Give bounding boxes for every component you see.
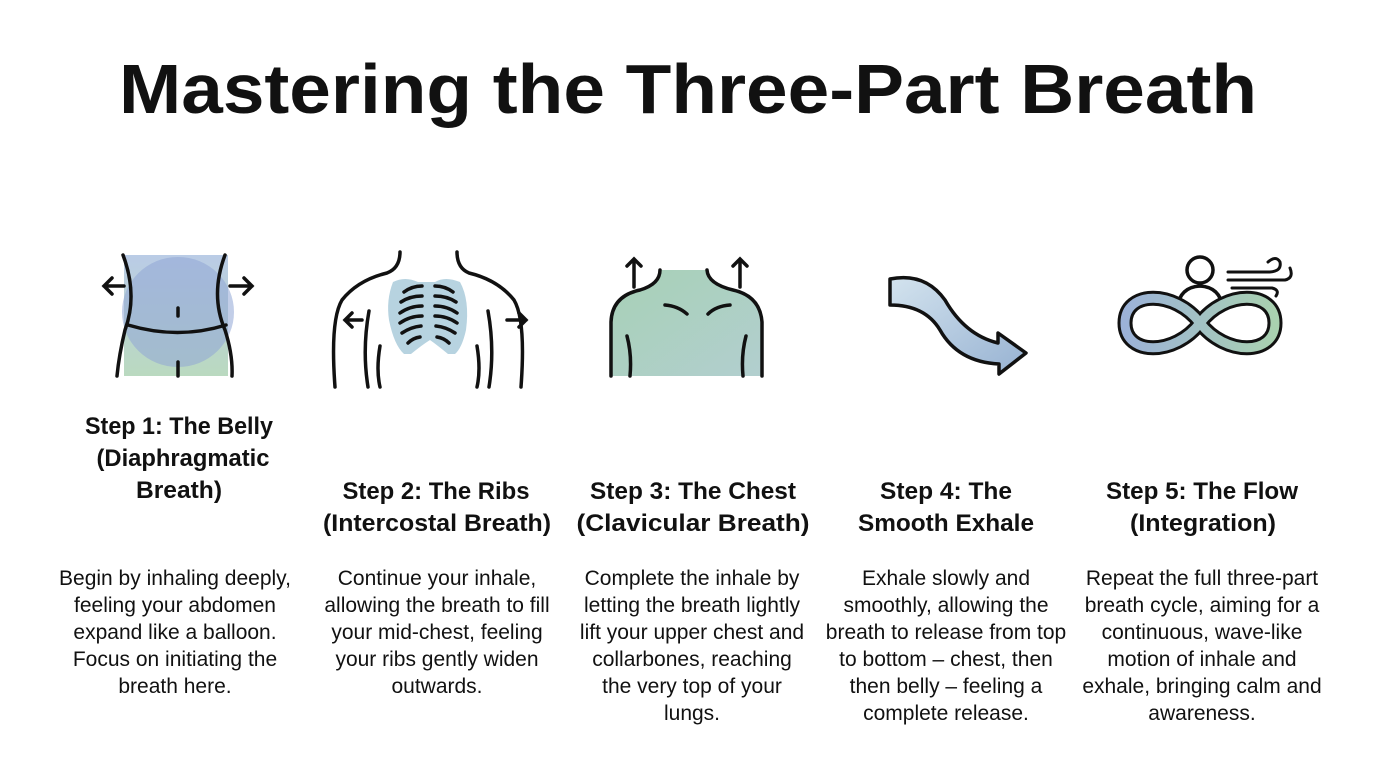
title: Mastering the Three-Part Breath <box>119 50 1257 128</box>
heading: step 2 <box>323 478 551 537</box>
text: step 1: Focus on initiating the <box>73 648 277 671</box>
heading: step 5 <box>1106 478 1298 537</box>
text: step 3: lift your upper chest and <box>580 621 804 644</box>
text: step 3: collarbones, reaching <box>592 648 792 671</box>
heading: step 5: (Integration) <box>1130 510 1276 537</box>
text: step 5: breath cycle, aiming for a <box>1085 594 1320 617</box>
text: step 5: motion of inhale and <box>1107 648 1297 671</box>
text: step 5 <box>1082 567 1322 725</box>
text: step 5: continuous, wave-like <box>1102 621 1302 644</box>
heading: step 3: (Clavicular Breath) <box>576 510 810 537</box>
icon: chest <box>611 259 762 376</box>
text: step 2: Continue your inhale, <box>338 567 536 590</box>
text: step 2: outwards. <box>391 675 483 698</box>
text: step 4: complete release. <box>863 702 1029 725</box>
text: step 2 <box>324 567 550 698</box>
text: step 3: letting the breath lightly <box>584 594 800 617</box>
text: step 3: the very top of your <box>602 675 782 698</box>
text: step 1: expand like a balloon. <box>73 621 277 644</box>
icon: ribs <box>334 252 526 387</box>
heading: step 3: Step 3: The Chest <box>590 478 796 505</box>
text: step 1: feeling your abdomen <box>74 594 276 617</box>
text: step 3 <box>580 567 804 725</box>
icon: infinity flow <box>1125 257 1291 348</box>
heading: step 3 <box>576 478 810 537</box>
heading: step 1 <box>85 413 274 504</box>
heading: step 2: (Intercostal Breath) <box>323 510 551 537</box>
text: step 5: exhale, bringing calm and <box>1082 675 1322 698</box>
text: step 1: Begin by inhaling deeply, <box>59 567 291 590</box>
text: step 2: allowing the breath to fill <box>324 594 550 617</box>
text: step 1 <box>59 567 291 698</box>
text: step 4 <box>826 567 1066 725</box>
heading: step 4: Step 4: The <box>880 478 1012 505</box>
heading: step 1: (Diaphragmatic <box>96 445 270 472</box>
heading: step 1: Breath) <box>136 477 222 504</box>
text: step 4: Exhale slowly and <box>862 567 1030 590</box>
text: step 5: awareness. <box>1148 702 1256 725</box>
text: step 4: breath to release from top <box>826 621 1066 644</box>
text: step 4: to bottom – chest, then <box>839 648 1053 671</box>
text: step 3: Complete the inhale by <box>585 567 800 590</box>
text: step 2: your mid-chest, feeling <box>331 621 543 644</box>
heading: step 4: Smooth Exhale <box>858 510 1034 537</box>
text: step 4: then belly – feeling a <box>850 675 1043 698</box>
text: step 5: Repeat the full three-part <box>1086 567 1318 590</box>
heading: step 4 <box>858 478 1034 537</box>
text: step 1: breath here. <box>118 675 232 698</box>
text: step 3: lungs. <box>664 702 720 725</box>
icon: wave arrow <box>890 278 1026 374</box>
text: step 4: smoothly, allowing the <box>843 594 1049 617</box>
icon: belly <box>104 255 252 376</box>
heading: step 2: Step 2: The Ribs <box>342 478 530 505</box>
heading: step 5: Step 5: The Flow <box>1106 478 1298 505</box>
heading: step 1: Step 1: The Belly <box>85 413 274 440</box>
text: step 2: your ribs gently widen <box>335 648 539 671</box>
